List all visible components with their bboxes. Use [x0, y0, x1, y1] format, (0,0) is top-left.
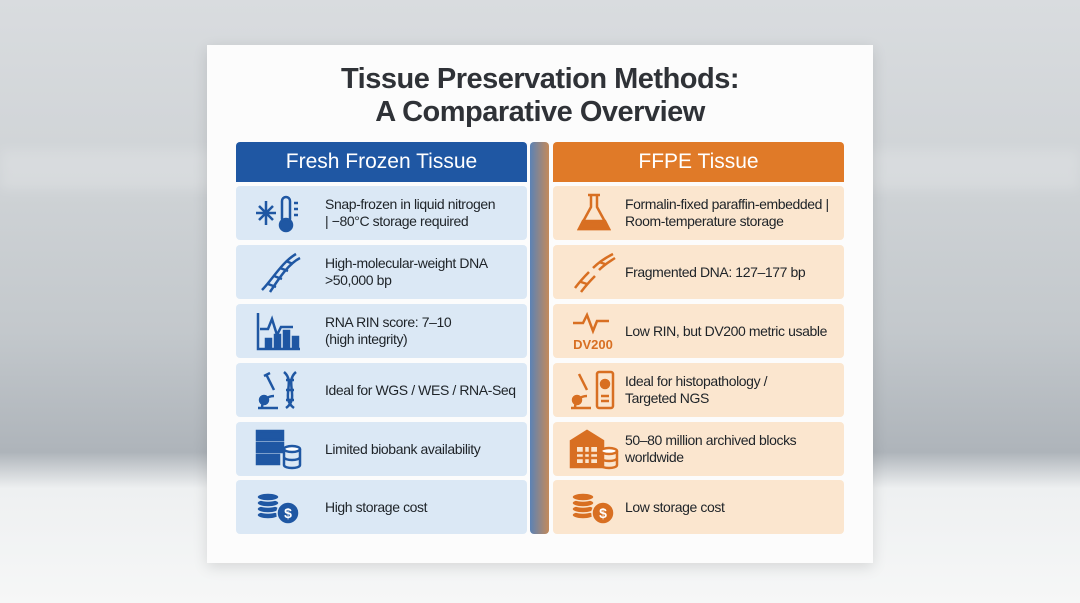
header: fresh frozen [236, 142, 527, 182]
left row 1: | −80°C storage required [325, 213, 468, 229]
right row 3: Low RIN, but DV200 metric usable [625, 322, 827, 338]
background shelves [0, 150, 1080, 190]
left row 3: (high integrity) [325, 331, 407, 347]
center divider bar [530, 142, 549, 534]
left row 2 [236, 245, 527, 299]
right row 5: worldwide [625, 449, 684, 465]
right row 4 [553, 363, 844, 417]
left row 4 [236, 363, 527, 417]
left row 1: Snap-frozen in liquid nitrogen [325, 196, 495, 212]
left row 6: High storage cost [325, 498, 427, 514]
left row 5 [236, 422, 527, 476]
right row 2: Fragmented DNA: 127–177 bp [625, 264, 805, 280]
left row 4: Ideal for WGS / WES / RNA-Seq [325, 382, 516, 398]
right row 4: Targeted NGS [625, 390, 709, 406]
right row 1: Formalin-fixed paraffin-embedded | [625, 196, 829, 212]
left row 6: $ [284, 505, 292, 521]
left row 3: RNA RIN score: 7–10 [325, 314, 451, 330]
right row 6: Low storage cost [625, 498, 724, 514]
right row 2 [553, 245, 844, 299]
right row 1: Room-temperature storage [625, 213, 783, 229]
left row 6 [236, 480, 527, 534]
right row 1 [553, 186, 844, 240]
right row 5: 50–80 million archived blocks [625, 432, 796, 448]
right row 3 [553, 304, 844, 358]
header: FFPE: FFPE Tissue [638, 150, 759, 173]
card [207, 45, 873, 563]
header: fresh frozen: Fresh Frozen Tissue [286, 150, 477, 173]
right row 5 [553, 422, 844, 476]
right row 6: $ [599, 505, 607, 521]
left row 3 [236, 304, 527, 358]
right row 3: DV200 [573, 337, 613, 352]
left row 5: Limited biobank availability [325, 440, 480, 456]
right row 6 [553, 480, 844, 534]
header: FFPE [553, 142, 844, 182]
left row 1 [236, 186, 527, 240]
left row 2: >50,000 bp [325, 272, 391, 288]
left row 2: High-molecular-weight DNA [325, 255, 488, 271]
title: Tissue Preservation Methods: [341, 63, 739, 95]
title [341, 63, 739, 128]
right row 4: Ideal for histopathology / [625, 373, 767, 389]
title: A Comparative Overview [375, 96, 705, 128]
